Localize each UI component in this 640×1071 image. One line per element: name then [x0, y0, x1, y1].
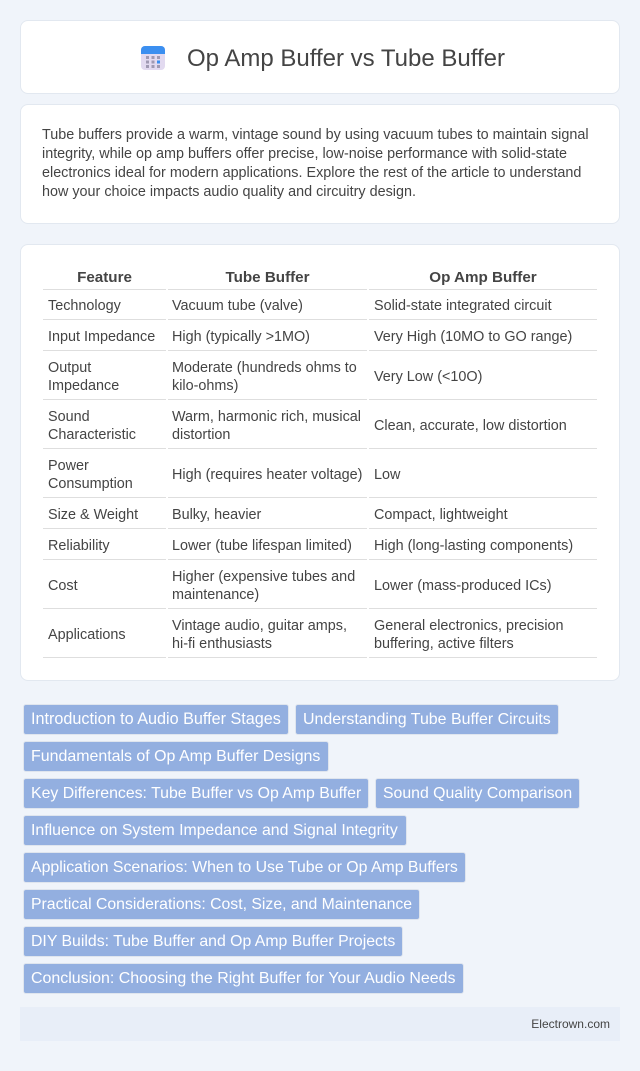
comparison table: Tube Buffer	[225, 269, 310, 286]
icon: calendar	[141, 46, 165, 70]
title text: Op Amp Buffer vs Tube Buffer	[187, 45, 505, 72]
tag	[23, 741, 329, 772]
intro text	[42, 127, 589, 200]
comparison table: Power	[48, 458, 89, 474]
comparison table: Cost	[48, 578, 78, 594]
tag	[23, 889, 420, 920]
intro text: integrity, while op amp buffers offer precise, low-noise performance with solid-state	[42, 146, 567, 162]
comparison table: kilo-ohms)	[172, 378, 238, 394]
tag	[23, 704, 289, 735]
comparison table: Applications	[48, 627, 126, 643]
comparison table panel	[20, 244, 620, 681]
comparison table: buffering, active filters	[374, 636, 514, 652]
topic tags	[23, 704, 580, 994]
tag: Conclusion: Choosing the Right Buffer for Your Audio Needs	[31, 970, 456, 987]
tag: Key Differences: Tube Buffer vs Op Amp Buffer	[31, 785, 361, 802]
comparison table: Reliability	[48, 538, 110, 554]
comparison table: Vintage audio, guitar amps,	[172, 618, 347, 634]
comparison table: Output	[48, 360, 91, 376]
footer	[20, 1007, 620, 1041]
comparison table: Input Impedance	[48, 329, 155, 345]
comparison table: Consumption	[48, 476, 133, 492]
comparison table: Sound	[48, 409, 90, 425]
comparison table: Characteristic	[48, 427, 136, 443]
comparison table: Low	[374, 467, 400, 483]
footer source: Electrown.com	[531, 1017, 610, 1031]
intro text: electronics ideal for modern applications. Explore the rest of the article to understand	[42, 165, 581, 181]
intro text: Tube buffers provide a warm, vintage sound by using vacuum tubes to maintain signal	[42, 127, 589, 143]
intro panel	[20, 104, 620, 224]
comparison table: Bulky, heavier	[172, 507, 261, 523]
tag	[23, 852, 466, 883]
title card	[20, 20, 620, 94]
tag	[295, 704, 559, 735]
tag: Influence on System Impedance and Signal Integrity	[31, 822, 398, 839]
comparison table: Size & Weight	[48, 507, 138, 523]
comparison table: Technology	[48, 298, 121, 314]
comparison table: Impedance	[48, 378, 119, 394]
tag: Introduction to Audio Buffer Stages	[31, 710, 281, 728]
comparison table: High (long-lasting components)	[374, 538, 573, 554]
comparison table: General electronics, precision	[374, 618, 564, 634]
comparison table: Solid-state integrated circuit	[374, 298, 552, 314]
tag	[23, 963, 464, 994]
comparison table: Warm, harmonic rich, musical	[172, 409, 361, 425]
comparison table: Very High (10MO to GO range)	[374, 329, 572, 345]
intro text: how your choice impacts audio quality and circuitry design.	[42, 184, 416, 200]
comparison table: Higher (expensive tubes and	[172, 569, 355, 585]
comparison table: Moderate (hundreds ohms to	[172, 360, 357, 376]
comparison table: High (typically >1MO)	[172, 329, 310, 345]
comparison table: Compact, lightweight	[374, 507, 508, 523]
tag: Sound Quality Comparison	[383, 785, 572, 802]
comparison table: Very Low (<10O)	[374, 369, 482, 385]
comparison table: Op Amp Buffer	[429, 269, 537, 286]
tag	[23, 815, 407, 846]
tag	[23, 926, 403, 957]
comparison table: Feature	[77, 269, 132, 286]
comparison table: Lower (tube lifespan limited)	[172, 538, 352, 554]
comparison table: Lower (mass-produced ICs)	[374, 578, 552, 594]
comparison table: High (requires heater voltage)	[172, 467, 362, 483]
tag: Practical Considerations: Cost, Size, and Maintenance	[31, 896, 412, 913]
comparison table: maintenance)	[172, 587, 259, 603]
comparison table: distortion	[172, 427, 230, 443]
comparison table: Vacuum tube (valve)	[172, 298, 303, 314]
tag: Fundamentals of Op Amp Buffer Designs	[31, 748, 320, 765]
tag: DIY Builds: Tube Buffer and Op Amp Buffer Projects	[31, 933, 395, 950]
tag: Application Scenarios: When to Use Tube or Op Amp Buffers	[31, 859, 458, 876]
comparison table: hi-fi enthusiasts	[172, 636, 272, 652]
tag	[23, 778, 369, 809]
comparison table: Clean, accurate, low distortion	[374, 418, 567, 434]
comparison table	[43, 269, 597, 658]
tag: Understanding Tube Buffer Circuits	[303, 711, 551, 728]
tag	[375, 778, 580, 809]
